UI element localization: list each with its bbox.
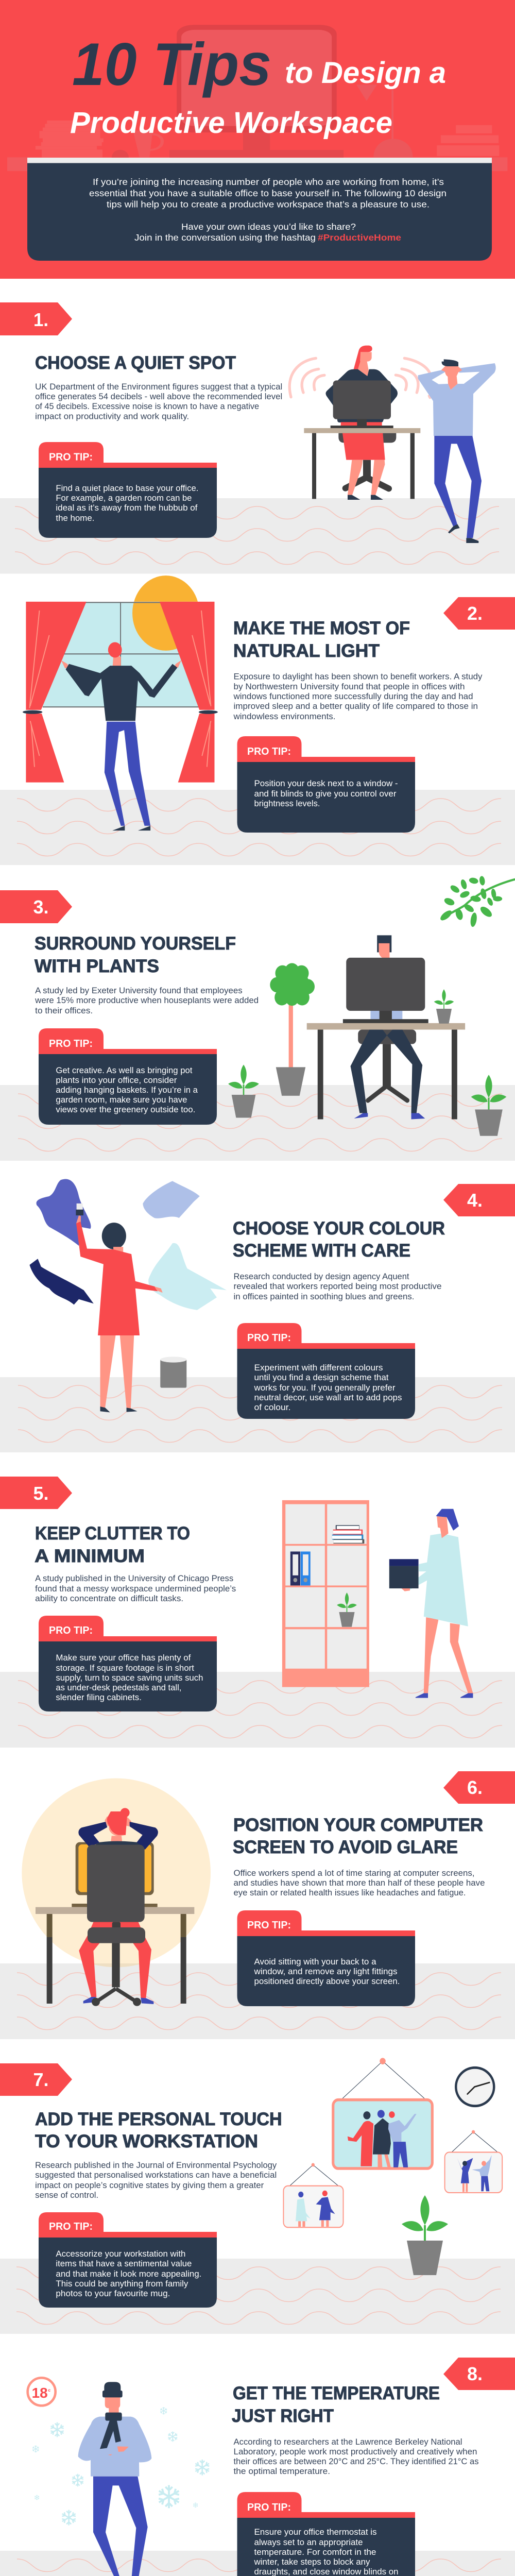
pro tip: of colour. [254, 1403, 290, 1412]
intro panel: If you’re joining the increasing number of people who are working from home, it’s [93, 177, 444, 187]
pro tip: For example, a garden room can be [56, 494, 192, 503]
body text: Office workers spend a lot of time staring at computer screens, [234, 1869, 475, 1878]
pro tip [237, 2492, 415, 2576]
body text: revealed that workers reported being most productive [234, 1282, 442, 1291]
body text: windows functioned more successfully during the day and had [233, 692, 473, 701]
number badge 4: 4. [467, 1190, 483, 1211]
illustration: man in winter clothes [28, 2378, 210, 2576]
body text: of 45 decibels. Excessive noise is known to have a negative [35, 402, 259, 411]
body text: UK Department of the Environment figures suggest that a typical [35, 382, 282, 392]
body text: suggested that personalised workstations can have a beneficial [35, 2171, 277, 2180]
icon: potted plant [402, 2195, 448, 2275]
hero header [0, 0, 515, 279]
number badge 5: 5. [33, 1483, 48, 1504]
pro tip: PRO TIP: [49, 451, 93, 463]
pro tip: and fit blinds to give you control over [254, 789, 397, 799]
body text: and studies have shown that more than half of these people have [234, 1878, 485, 1888]
pro tip: Find a quiet place to base your office. [56, 484, 198, 493]
number badge 4 [443, 1184, 515, 1216]
pro tip: slender filing cabinets. [56, 1693, 142, 1702]
number badge 6: 6. [467, 1777, 483, 1798]
pro tip: This could be anything from family [56, 2279, 188, 2289]
heading: SURROUND YOURSELF [35, 934, 236, 954]
intro panel: essential that you have a suitable office to base yourself in. The following 10 design [89, 188, 447, 198]
heading: CHOOSE YOUR COLOUR [233, 1218, 445, 1239]
pro tip [39, 1028, 217, 1125]
body text: Exposure to daylight has been shown to benefit workers. A study [234, 672, 483, 681]
pro tip: and that make it look more appealing. [56, 2269, 201, 2279]
body text [35, 986, 259, 1015]
floor band [0, 1672, 515, 1748]
tip 1 [0, 302, 515, 574]
pro tip [237, 736, 415, 833]
heading: MAKE THE MOST OF [233, 618, 410, 638]
intro panel: Have your own ideas you’d like to share? [181, 222, 356, 232]
illustration: desk with plants [270, 876, 515, 1119]
pro tip: as under-desk pedestals and tall, [56, 1683, 181, 1692]
tip 5 [0, 1477, 515, 1748]
body text [35, 382, 282, 421]
tip 6 [0, 1771, 515, 2039]
number badge 8 [443, 2358, 515, 2390]
pro tip: winter, take steps to block any [253, 2557, 370, 2567]
body text [234, 2437, 479, 2476]
tip 3 [0, 876, 515, 1161]
heading: ADD THE PERSONAL TOUCH [35, 2109, 282, 2129]
number badge 3 [0, 890, 72, 923]
heading: WITH PLANTS [35, 956, 159, 976]
body text: Laboratory, people work most productively and creatively when [234, 2447, 477, 2456]
number badge 5 [0, 1477, 72, 1509]
pro tip: works for you. If you generally prefer [253, 1383, 396, 1393]
body text: their offices are between 20°C and 25°C. They identified 21°C as [234, 2457, 479, 2466]
illustration: noisy office [289, 346, 496, 543]
intro panel: Join in the conversation using the hashtag [134, 232, 316, 243]
heading [232, 2383, 440, 2426]
pro tip: window, and remove any light fittings [253, 1967, 398, 1976]
body text: impact on people’s cognitive states by giving them a greater [35, 2181, 264, 2190]
title: 10 Tips [72, 30, 271, 98]
number badge 1 [0, 302, 72, 335]
heading [233, 618, 410, 661]
pro tip: PRO TIP: [247, 1332, 291, 1344]
tip 4 [0, 1179, 515, 1452]
pro tip: brightness levels. [254, 799, 320, 808]
floor band [0, 2259, 515, 2334]
body text: Research published in the Journal of Environmental Psychology [35, 2161, 277, 2170]
pro tip [237, 1323, 415, 1419]
heading [233, 1218, 445, 1261]
title: to Design a [285, 56, 446, 90]
pro tip: the home. [56, 514, 94, 523]
body text: by Northwestern University found that people in offices with [234, 682, 465, 691]
illustration: family photos and clock [283, 2058, 502, 2227]
heading: SCHEME WITH CARE [233, 1241, 410, 1261]
number badge 7: 7. [33, 2069, 48, 2090]
body text: office generates 54 decibels - well above the recommended level [35, 392, 282, 401]
backdrop desk illustration [7, 25, 507, 171]
pro tip: photos to your favourite mug. [56, 2289, 170, 2298]
temperature badge: c [48, 2387, 50, 2393]
floor band [0, 498, 515, 574]
number badge 2: 2. [467, 603, 483, 624]
pro tip: temperature. For comfort in the [254, 2548, 376, 2557]
icon: potted plants [228, 989, 506, 1136]
temperature badge: 18 [32, 2385, 48, 2401]
pro tip: supply, turn to space saving units such [56, 1673, 203, 1683]
body text: ability to concentrate on difficult tasks. [35, 1594, 183, 1603]
pro tip: plants into your office, consider [56, 1076, 177, 1085]
pro tip: PRO TIP: [49, 2221, 93, 2232]
heading: KEEP CLUTTER TO [35, 1523, 190, 1544]
body text [35, 2161, 277, 2200]
body text: A study published in the University of Chicago Press [35, 1574, 233, 1583]
heading: CHOOSE A QUIET SPOT [35, 353, 236, 373]
pro tip: always set to an appropriate [254, 2538, 363, 2547]
body text: were 15% more productive when houseplants were added [35, 996, 259, 1005]
heading: SCREEN TO AVOID GLARE [233, 1837, 458, 1857]
pro tip [39, 2212, 217, 2308]
pro tip [237, 1910, 415, 2006]
body text [234, 1869, 485, 1897]
body text: the optimal temperature. [234, 2467, 330, 2476]
floor band [0, 2551, 515, 2576]
pro tip: Avoid sitting with your back to a [254, 1957, 376, 1967]
floor band [0, 790, 515, 865]
body text: windowless environments. [233, 712, 336, 721]
pro tip [39, 442, 217, 538]
icon: shelf plant [337, 1592, 357, 1627]
illustration: window with curtains [23, 575, 218, 831]
body text: improved sleep and a better quality of life compared to those in [234, 702, 478, 711]
intro panel: tips will help you to create a productive workspace that’s a pleasure to use. [107, 199, 430, 209]
pro tip: adding hanging baskets. If you’re in a [56, 1086, 198, 1095]
number badge 8: 8. [467, 2363, 483, 2384]
heading [233, 1815, 483, 1857]
body text: A study led by Exeter University found that employees [35, 986, 243, 995]
pro tip: Accessorize your workstation with [56, 2249, 185, 2259]
body text [233, 672, 483, 721]
pro tip: Position your desk next to a window - [254, 779, 398, 788]
heading: NATURAL LIGHT [233, 641, 380, 661]
heading [35, 2109, 282, 2151]
pro tip: Experiment with different colours [254, 1363, 383, 1372]
heading: POSITION YOUR COMPUTER [233, 1815, 483, 1835]
floor band [0, 1377, 515, 1452]
heading [35, 934, 236, 976]
pro tip: PRO TIP: [247, 746, 291, 757]
pro tip: ideal as it’s away from the hubbub of [56, 503, 198, 513]
pro tip: neutral decor, use wall art to add pops [254, 1393, 402, 1402]
tip 8 [0, 2358, 515, 2576]
hero background [0, 0, 515, 279]
temperature badge [28, 2378, 56, 2405]
number badge 7 [0, 2063, 72, 2096]
pro tip [39, 1616, 217, 1711]
tip 2 [0, 575, 515, 865]
number badge 1: 1. [33, 309, 48, 330]
illustration: tidy shelves [282, 1500, 473, 1698]
pro tip: PRO TIP: [49, 1625, 93, 1636]
pro tip: Make sure your office has plenty of [56, 1653, 191, 1663]
body text: found that a messy workspace undermined people’s [35, 1584, 236, 1594]
pro tip: views over the greenery outside too. [56, 1105, 195, 1114]
pro tip: positioned directly above your screen. [254, 1977, 400, 1986]
pro tip: items that have a sentimental value [56, 2259, 192, 2268]
pro tip: until you find a design scheme that [254, 1373, 389, 1382]
heading: JUST RIGHT [232, 2406, 334, 2426]
number badge 2 [443, 597, 515, 630]
floor band [0, 1085, 515, 1161]
body text: impact on productivity and work quality. [35, 412, 189, 421]
heading: GET THE TEMPERATURE [233, 2383, 440, 2403]
intro panel [27, 158, 492, 261]
body text: to their offices. [35, 1006, 93, 1015]
intro panel: #ProductiveHome [318, 232, 401, 243]
pro tip: Ensure your office thermostat is [254, 2528, 377, 2537]
pro tip: garden room, make sure you have [56, 1095, 187, 1105]
number badge 3: 3. [33, 896, 48, 918]
snowflakes [32, 2407, 210, 2526]
illustration: woman painting [29, 1179, 227, 1412]
heading: A MINIMUM [35, 1546, 145, 1566]
pro tip: storage. If square footage is in short [56, 1664, 194, 1673]
heading: TO YOUR WORKSTATION [35, 2131, 258, 2151]
floor band [0, 1963, 515, 2039]
body text [234, 1272, 442, 1301]
pro tip: PRO TIP: [247, 1920, 291, 1931]
pro tip: PRO TIP: [49, 1038, 93, 1049]
pro tip: Get creative. As well as bringing pot [56, 1066, 193, 1075]
illustration: glare on screen [22, 1778, 211, 2006]
heading [35, 1523, 190, 1566]
body text: in offices painted in soothing blues and greens. [234, 1292, 414, 1301]
body text [35, 1574, 236, 1603]
body text: Research conducted by design agency Aquent [234, 1272, 409, 1281]
pro tip: PRO TIP: [247, 2502, 291, 2513]
title [70, 30, 446, 140]
number badge 6 [443, 1771, 515, 1804]
body text: sense of control. [35, 2191, 98, 2200]
tip 7 [0, 2058, 515, 2334]
body text: According to researchers at the Lawrence Berkeley National [234, 2437, 462, 2447]
body text: eye stain or related health issues like headaches and fatigue. [234, 1888, 466, 1897]
title: Productive Workspace [70, 106, 392, 140]
